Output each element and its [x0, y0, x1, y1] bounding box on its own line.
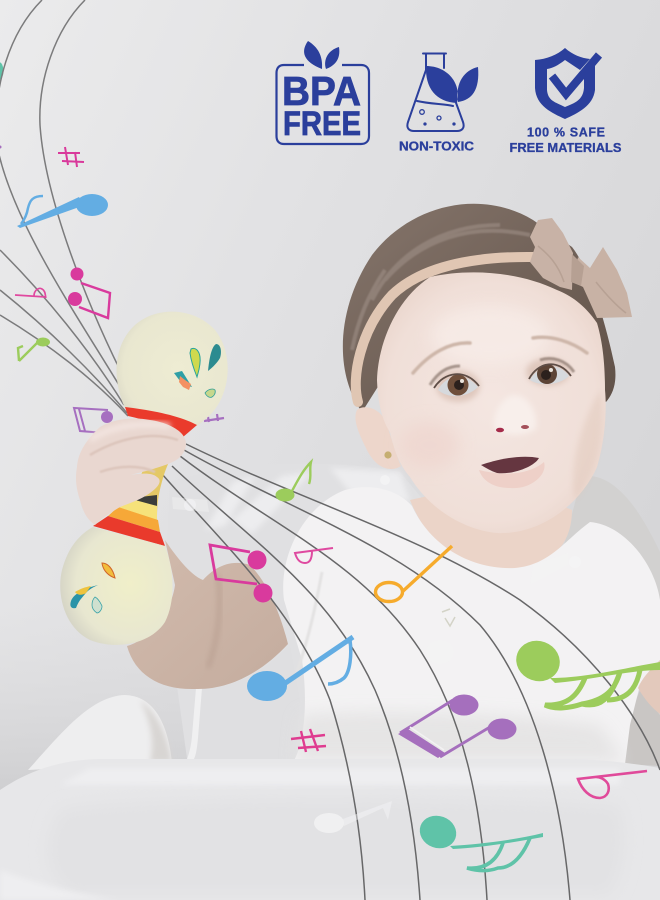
arm crease: [208, 575, 220, 668]
chair white strips: [205, 468, 410, 534]
chair post: [186, 688, 202, 762]
high chair: [28, 464, 660, 780]
sleeve seam: [297, 572, 322, 672]
note: green double flag: [510, 635, 660, 708]
label: NON-TOXIC: [399, 140, 474, 154]
baby arm: [127, 540, 288, 689]
earring: [384, 451, 392, 459]
chair seat below arm: [190, 645, 300, 762]
label second line: FREE MATERIALS: [510, 141, 622, 155]
nose: [494, 395, 536, 435]
ear: [355, 407, 401, 469]
note: orange eighth: [376, 546, 452, 602]
cheek blush: [400, 421, 460, 469]
feather stickers top: [174, 344, 221, 397]
chair back: [165, 464, 440, 780]
note: magenta sharp: [58, 147, 84, 167]
flask: [407, 54, 464, 131]
hair highlights: [352, 225, 530, 350]
badge: BPA free: [276, 41, 369, 144]
lower background shading: [0, 600, 300, 800]
note: blue eighth large: [247, 637, 353, 701]
right eye: [526, 358, 574, 386]
note: green eighth: [18, 338, 50, 361]
note: pink flat: [15, 288, 46, 298]
flask bubbles: [420, 110, 455, 125]
chair armrest: [28, 695, 172, 770]
left eye: [430, 366, 480, 402]
note: purple sharp fragment: [204, 414, 224, 422]
right cheek shade: [573, 390, 602, 500]
teal edge note: [0, 62, 4, 80]
note: magenta beamed pair on arm: [210, 545, 272, 602]
flask leaves: [426, 66, 478, 103]
leaves: [304, 41, 339, 69]
maraca: [60, 312, 228, 645]
tray front rim: [0, 870, 120, 900]
forehead glow: [430, 305, 550, 365]
note: blue eighth: [17, 194, 108, 228]
shield: [535, 48, 595, 119]
tray inner shade: [47, 798, 624, 895]
purple edge note: [0, 146, 2, 148]
red ring: [125, 407, 197, 437]
hand: [76, 418, 186, 525]
tray: [0, 759, 660, 900]
neck: [410, 480, 572, 570]
right arm fragment: [638, 660, 660, 714]
mouth: [479, 457, 545, 488]
hair bow: [530, 218, 632, 318]
BPA wordmark: BPA: [282, 68, 361, 114]
FREE wordmark: FREE: [283, 105, 361, 143]
note: green eighth on chair: [276, 462, 311, 502]
note: pink small flat: [295, 548, 333, 563]
translucent white notes: [172, 475, 581, 833]
right chair wing: [560, 476, 660, 680]
shirt fold shading: [295, 712, 625, 762]
check mark: [552, 55, 599, 94]
armrest shadow: [140, 700, 172, 762]
label: 100 % SAFE: [527, 126, 605, 140]
note: pink flat lower: [578, 771, 647, 798]
note: magenta sharp lower: [291, 729, 326, 752]
eyebrows: [413, 337, 587, 373]
top ball: [117, 312, 228, 426]
badge: safe materials: [510, 48, 622, 155]
note: purple beamed pair on shirt: [398, 694, 516, 758]
face: [377, 272, 606, 533]
baby: [283, 204, 660, 764]
badge: non-toxic: [399, 54, 478, 154]
tray highlight: [60, 768, 620, 785]
badge frame: [276, 65, 369, 144]
note: teal double flag: [415, 811, 543, 871]
feather stickers bottom: [70, 563, 115, 613]
right dark gap: [622, 690, 660, 766]
hair: [343, 204, 615, 412]
headband: [356, 257, 535, 402]
white shirt: [283, 487, 660, 764]
note: purple beamed pair: [74, 408, 113, 433]
note: magenta beamed pair: [68, 268, 110, 318]
bottom ball: [60, 527, 173, 645]
handle: [93, 440, 180, 546]
